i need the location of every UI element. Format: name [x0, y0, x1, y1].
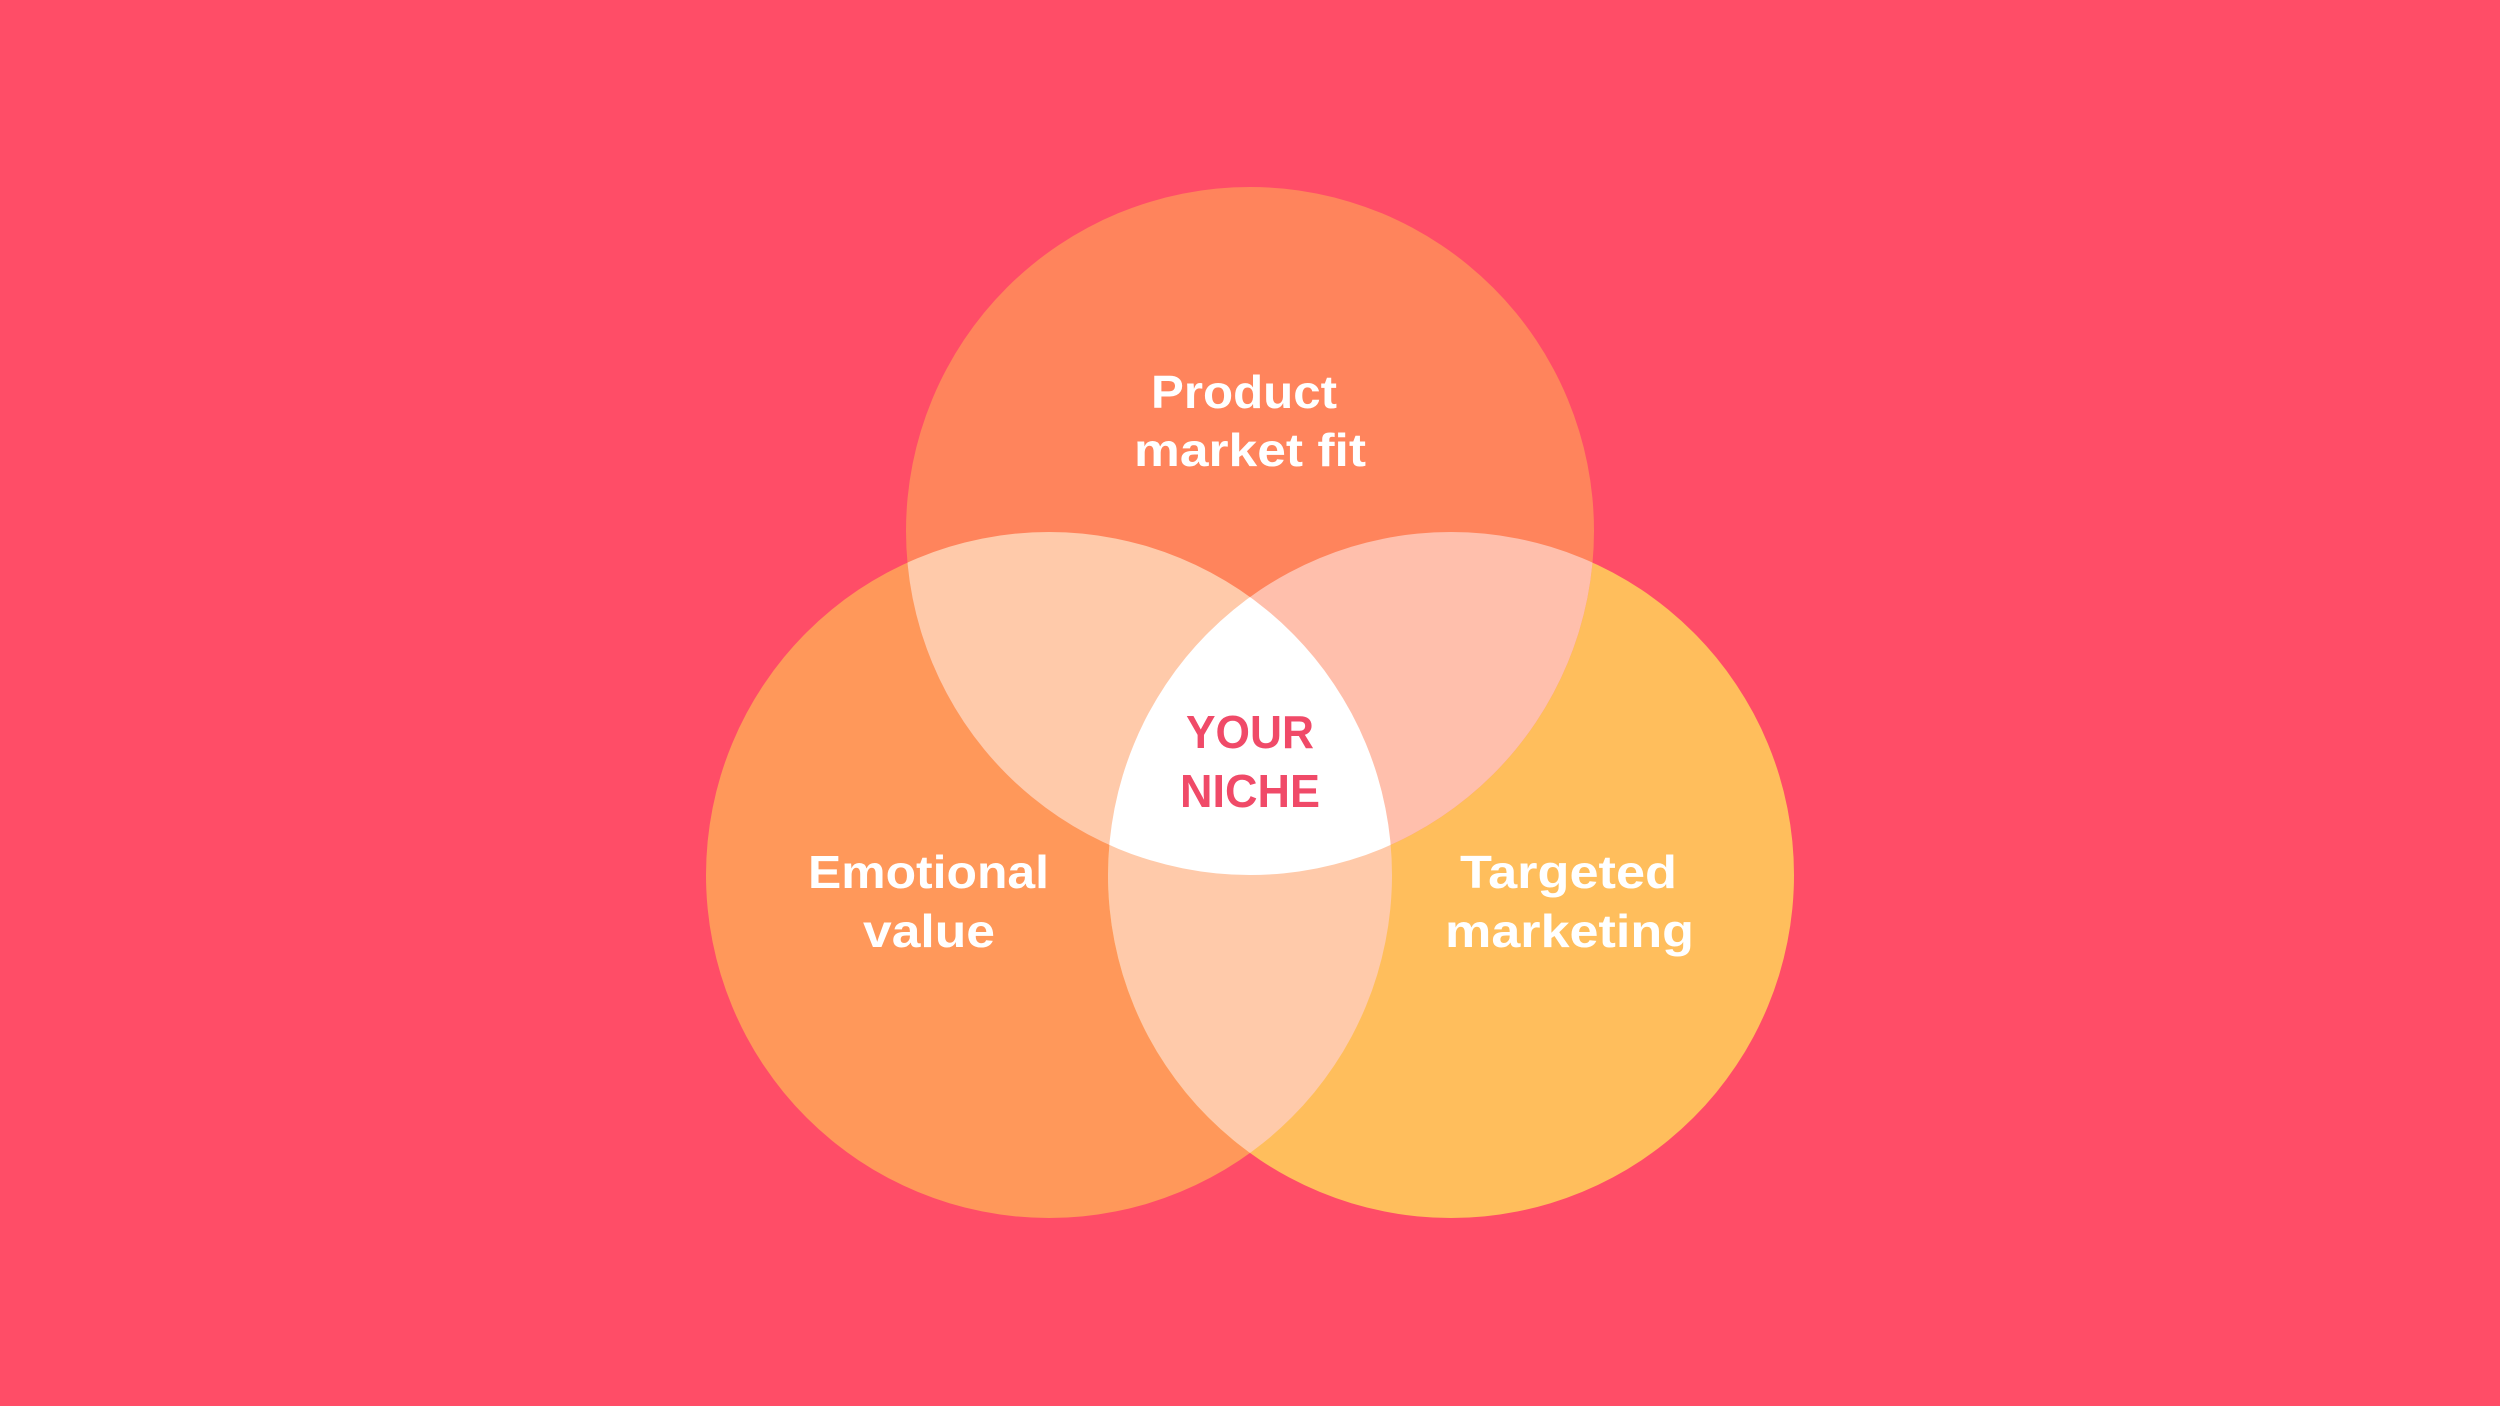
label: your niche: NICHE [1180, 765, 1320, 817]
label: targeted marketing: marketing [1445, 905, 1694, 957]
label: product market fit [1134, 366, 1366, 476]
overlap: product and targeted [1250, 532, 1592, 845]
venn diagram [706, 187, 1794, 1218]
label: product market fit: market fit [1134, 424, 1366, 476]
overlap: product and emotional [908, 532, 1250, 845]
label: product market fit: Product [1151, 366, 1337, 418]
label: emotional value: Emotional [808, 846, 1049, 898]
label: your niche [1180, 706, 1320, 817]
center: your niche region [1109, 597, 1391, 875]
overlap: emotional and targeted [1108, 845, 1392, 1153]
label: emotional value [808, 846, 1049, 957]
circle: emotional value [706, 532, 1392, 1218]
label: targeted marketing [1445, 846, 1694, 957]
label: your niche: YOUR [1186, 706, 1314, 758]
label: emotional value: value [863, 905, 995, 957]
label: targeted marketing: Targeted [1460, 846, 1677, 898]
circle: targeted marketing [1108, 532, 1794, 1218]
circle: product market fit [906, 187, 1594, 875]
